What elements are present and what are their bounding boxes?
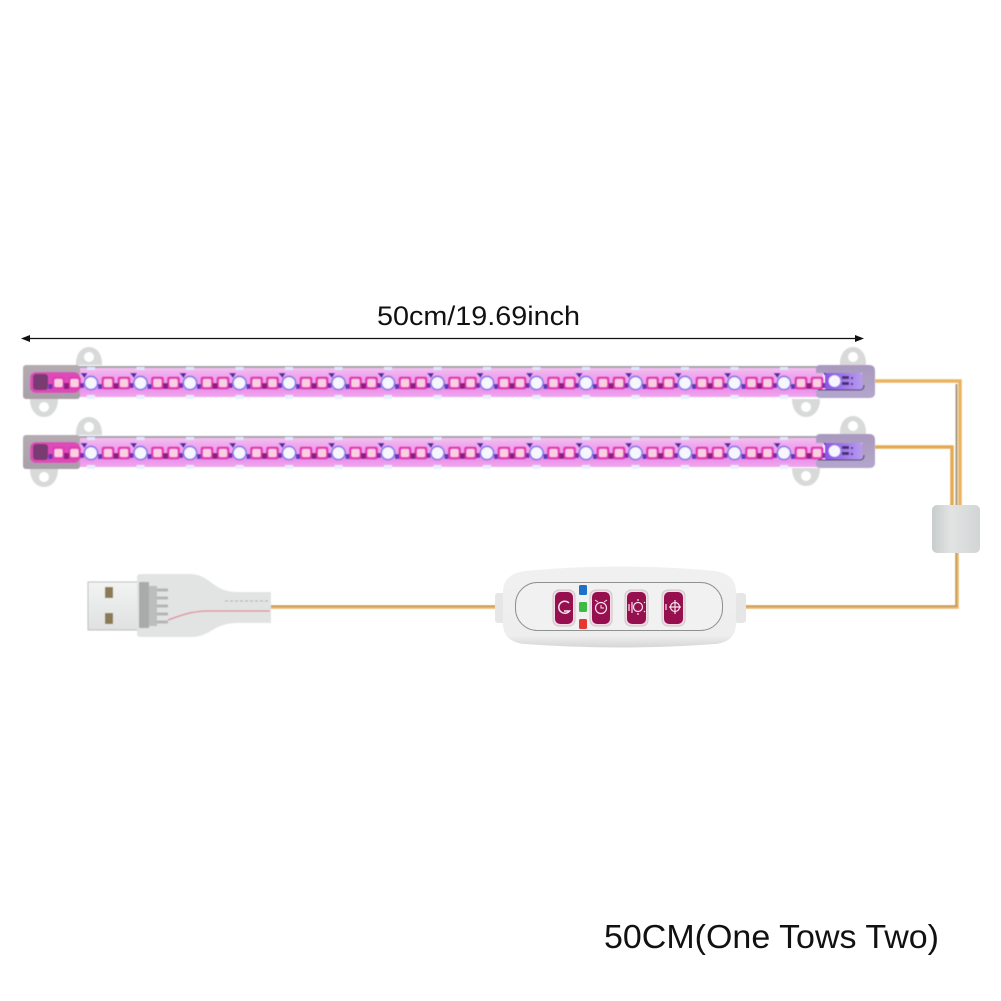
colour mode button (625, 590, 648, 626)
cable splitter block (932, 505, 980, 553)
right end cap (816, 365, 875, 398)
right end cap (816, 434, 875, 468)
dimension label: 50cm/19.69inch (377, 301, 580, 331)
dimension arrow (21, 335, 864, 342)
mounting clips (30, 416, 866, 487)
green indicator (579, 602, 587, 612)
translucent housing (137, 574, 271, 637)
left end cap (23, 365, 88, 399)
product caption: 50CM(One Tows Two) (604, 918, 939, 955)
left end cap (23, 435, 88, 469)
power button (553, 590, 575, 626)
light bar 2 (23, 416, 875, 487)
mounting clips (30, 347, 866, 417)
controller body (503, 566, 736, 648)
LEDs (84, 367, 830, 399)
USB plug (88, 574, 271, 637)
blue indicator (579, 585, 587, 595)
wiring: orange cables (270, 381, 960, 607)
strip body (78, 436, 823, 467)
strip body (78, 366, 823, 397)
timer button (590, 590, 612, 626)
red indicator (579, 619, 587, 629)
LEDs (84, 437, 830, 469)
metal connector (88, 582, 140, 630)
side tabs (495, 593, 746, 623)
brightness button (662, 590, 685, 626)
controller panel outline (516, 582, 722, 630)
light bar 1 (23, 347, 875, 417)
controller (495, 566, 746, 648)
